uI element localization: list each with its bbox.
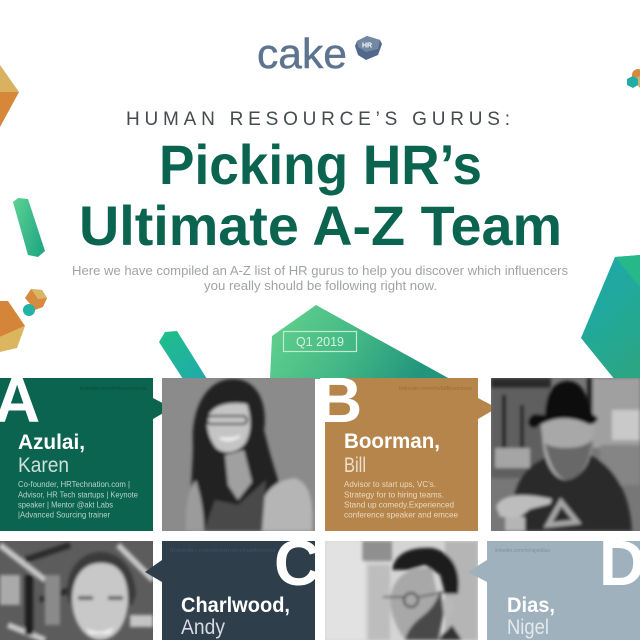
panel: B card [316,364,497,531]
panel: A card: Karen [18,454,69,477]
photo: Bill Boorman [491,378,640,531]
description: conference speaker and emcee [344,510,458,520]
name: Azulai, [18,431,85,454]
description [344,479,458,520]
date badge [284,332,356,352]
intro text: Here we have compiled an A-Z list of HR gurus to help you discover which influencers [72,263,568,278]
panel: C card: Andy [181,616,225,639]
name: Boorman, [344,430,440,453]
photo: Andy Charlwood [0,541,153,640]
decorative polygon: right teal [581,255,640,380]
letter B: B [316,364,362,436]
logo: cakeHR: cake [257,30,347,77]
decorative gem: top left [0,65,19,127]
icon: HR cube: HR [362,42,372,50]
handle: linkedin.com/in/billboorman [399,386,472,392]
intro text [72,263,568,293]
name: Charlwood, [181,594,290,617]
handle: linkedin.com/in/andycharlwood [170,548,275,554]
description: speaker | Mentor @akt Labs [18,500,113,510]
title: Ultimate A-Z Team [79,194,562,257]
intro text: you really should be following right now. [204,278,437,293]
panel: C card [145,527,320,640]
handle: linkedin.com/in/nigeldias [495,548,550,554]
title [79,133,562,257]
letter C: C [274,527,320,599]
description [18,479,138,520]
description: Strategy for to hiring teams. [344,490,444,500]
photo: Karen Azulai [162,378,315,531]
description: Co-founder, HRTechnation.com | [18,479,130,489]
handle: linkedin.com/in/karenazulai [80,386,147,392]
decorative gems: lower left [0,289,47,352]
description: Advisor to start ups, VC’s. [344,479,436,489]
panel: D card [468,527,640,640]
description: Advisor, HR Tech startups | Keynote [18,490,138,500]
description: |Advanced Sourcing trainer [18,510,110,520]
heading: eyebrow: HUMAN RESOURCE’S GURUS: [126,109,510,130]
panel: A card [0,364,172,531]
decorative prism: green [13,198,45,257]
decorative gems: upper right [627,69,640,88]
decorative bar: teal [159,331,207,379]
date badge: Q1 2019 [296,334,344,349]
decorative polygon: green [270,305,450,379]
title: Picking HR’s [159,133,482,196]
photo: Nigel Dias [325,541,478,640]
panel: D card: Nigel [507,616,549,639]
name: Dias, [507,594,555,617]
panel: B card: Bill [344,454,366,477]
description: Stand up comedy.Experienced [344,500,454,510]
